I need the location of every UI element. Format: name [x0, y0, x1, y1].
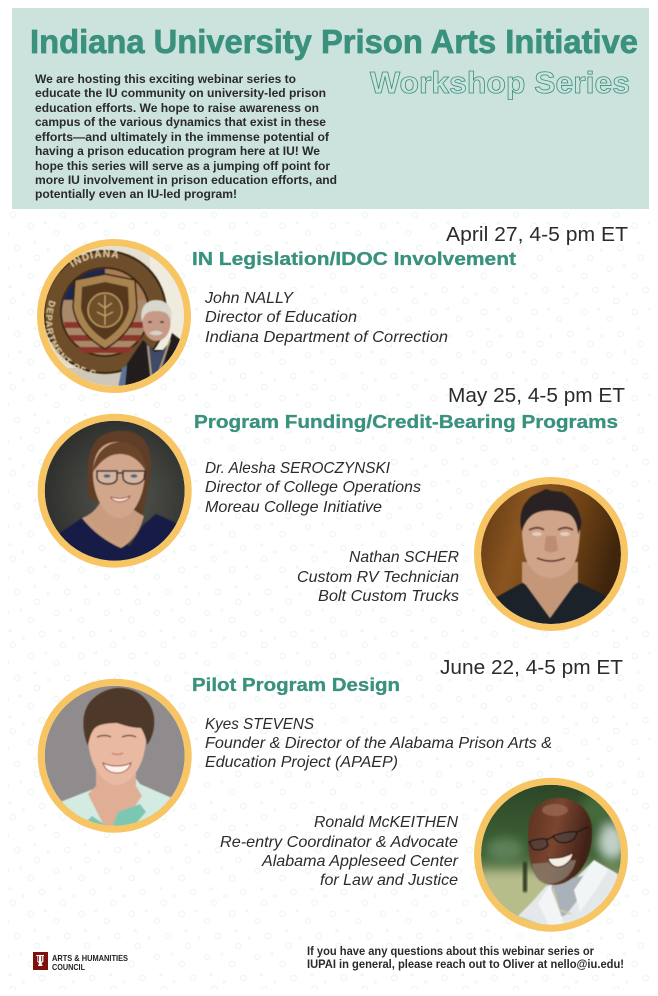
- intro paragraph: We are hosting this exciting webinar series to: [35, 72, 296, 86]
- intro paragraph: efforts—and ultimately in the immense potential of: [35, 130, 330, 144]
- portrait: Ronald McKeithen: [478, 781, 626, 936]
- icon: IU trident: [33, 952, 48, 970]
- logo: Arts & Humanities Council: [33, 952, 128, 972]
- date: May 25: May 25, 4-5 pm ET: [448, 385, 625, 407]
- logo: Arts & Humanities Council: ARTS & HUMANITIES: [52, 953, 128, 963]
- intro paragraph: education efforts. We hope to raise awareness on: [35, 101, 319, 115]
- speaker: John Nally: [204, 290, 448, 346]
- heading: IN Legislation/IDOC Involvement: IN Legislation/IDOC Involvement: [192, 249, 516, 269]
- portrait: Kyes Stevens: [40, 680, 190, 832]
- speaker: Alesha Seroczynski: [205, 460, 421, 516]
- speaker: Alesha Seroczynski: Director of College Operations: [205, 479, 421, 496]
- intro paragraph: potentially even an IU-led program!: [35, 187, 237, 201]
- speaker: Alesha Seroczynski: Dr. Alesha SEROCZYNSKI: [205, 460, 391, 477]
- speaker: John Nally: Director of Education: [205, 309, 357, 326]
- footer contact note: IUPAI in general, please reach out to Oliver at nello@iu.edu!: [307, 959, 624, 971]
- intro paragraph: having a prison education program here at IU! We: [35, 144, 320, 158]
- background dot and triangle pattern: [8, 209, 650, 990]
- icon: wooden seal: [44, 249, 168, 376]
- portrait: Alesha Seroczynski: [40, 415, 192, 573]
- speaker: Nathan Scher: Bolt Custom Trucks: [318, 588, 459, 605]
- icon: wooden seal: INDIANA: [69, 249, 118, 268]
- intro paragraph: educate the IU community on university-led prison: [35, 86, 326, 100]
- speaker: Ronald McKeithen: Re-entry Coordinator & Advocate: [220, 834, 458, 851]
- heading: Program Funding/Credit-Bearing Programs: Program Funding/Credit-Bearing Programs: [194, 412, 618, 432]
- date: April 27: April 27, 4-5 pm ET: [446, 224, 628, 246]
- speaker: Kyes Stevens: Kyes STEVENS: [205, 716, 314, 733]
- portrait: John Nally with seal: [37, 239, 191, 393]
- icon: wooden seal: DEPARTMENT OF C: [45, 300, 97, 376]
- date: June 22: June 22, 4-5 pm ET: [440, 657, 623, 679]
- speaker: Ronald McKeithen: [220, 814, 459, 889]
- heading: Pilot Program Design: Pilot Program Design: [192, 675, 400, 695]
- speaker: Ronald McKeithen: Alabama Appleseed Center: [261, 853, 459, 870]
- panel: header banner: [12, 8, 649, 209]
- speaker: Alesha Seroczynski: Moreau College Initiative: [205, 499, 382, 516]
- speaker: Ronald McKeithen: Ronald McKEITHEN: [314, 814, 458, 831]
- speaker: John Nally: John NALLY: [204, 290, 294, 307]
- speaker: Ronald McKeithen: for Law and Justice: [320, 872, 458, 889]
- title: Indiana University Prison Arts Initiative: [30, 23, 638, 60]
- portrait: Nathan Scher: [478, 480, 624, 630]
- intro paragraph: more IU involvement in prison education efforts, and: [35, 173, 337, 187]
- subtitle: Workshop Series: Workshop Series: [370, 65, 630, 100]
- speaker: Nathan Scher: [297, 549, 459, 605]
- speaker: Kyes Stevens: Founder & Director of the Alabama Prison Arts &: [205, 735, 552, 752]
- speaker: Nathan Scher: Custom RV Technician: [297, 569, 459, 586]
- intro paragraph: hope this series will serve as a jumping off point for: [35, 159, 330, 173]
- intro paragraph: campus of the various dynamics that exist in these: [35, 115, 326, 129]
- speaker: Nathan Scher: Nathan SCHER: [349, 549, 459, 566]
- man in vest: [118, 299, 180, 386]
- speaker: Kyes Stevens: [205, 716, 552, 771]
- speaker: Kyes Stevens: Education Project (APAEP): [205, 754, 398, 771]
- footer contact note: [307, 946, 624, 971]
- logo: Arts & Humanities Council: COUNCIL: [52, 962, 85, 972]
- speaker: John Nally: Indiana Department of Correction: [205, 329, 448, 346]
- footer contact note: If you have any questions about this webinar series or: [307, 946, 594, 958]
- intro paragraph: [35, 72, 337, 201]
